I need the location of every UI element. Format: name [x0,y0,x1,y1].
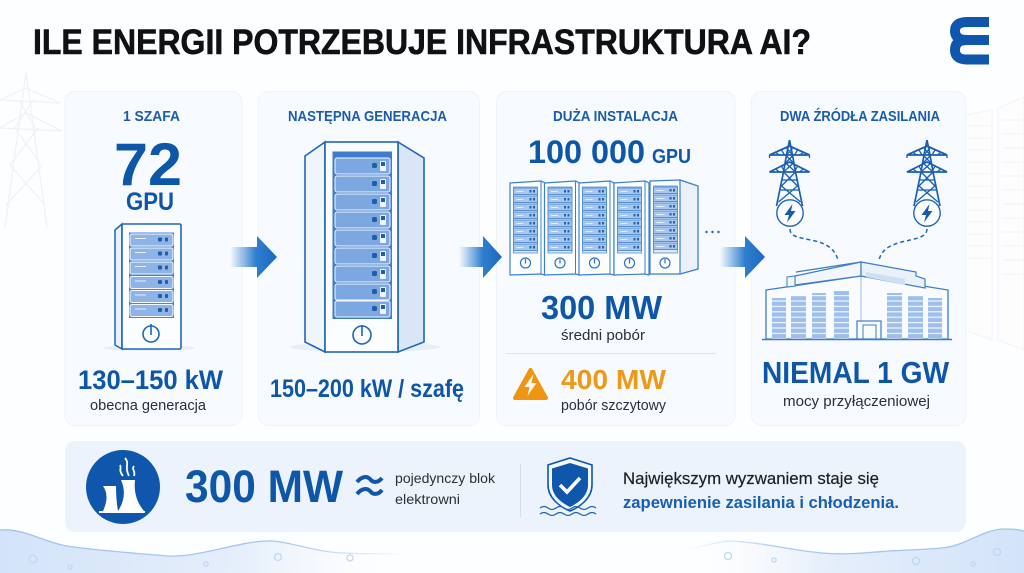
icon: power plant [86,450,160,524]
bottom banner [65,441,966,532]
heading: 1 szafa: 1 SZAFA [123,108,180,125]
panel: następna generacja [258,92,480,426]
number: 100 000 GPU: 100 000 [528,134,645,170]
heading: duża instalacja: DUŻA INSTALACJA [553,108,678,125]
logo [955,22,989,60]
number: 72 GPU: 72 [114,131,182,198]
icon: right pylon [907,140,947,226]
heading: dwa źródła zasilania: DWA ŹRÓDŁA ZASILANIA [780,107,940,125]
arrow 1 [230,236,277,278]
panel: duża instalacja [496,92,735,426]
icon: left pylon [770,140,810,226]
symbol: approximately [357,477,382,494]
decorative background pylon [0,72,62,228]
panel: 1 szafa [65,92,242,426]
label: pojedynczy blok elektrowni: pojedynczy blok [395,470,496,486]
value: 130–150 kW: 130–150 kW [78,365,223,395]
icon: server rack [103,224,195,351]
arrow 2 [459,236,502,278]
heading: następna generacja: NASTĘPNA GENERACJA [288,108,447,125]
decorative background racks [965,97,1024,350]
value: 300 MW: 300 MW [541,289,663,326]
number: 72 GPU: GPU [126,188,174,216]
icon: row of server racks [510,180,720,275]
label: pobór szczytowy: pobór szczytowy [561,397,666,414]
icon: data center building [762,262,952,340]
callout text: Największym wyzwaniem staje się [623,469,879,488]
label: pojedynczy blok elektrowni: elektrowni [395,491,460,507]
icon: warning [515,370,546,398]
value: 300 MW: 300 MW [185,461,343,512]
power lines [790,229,927,260]
icon: shield [540,458,596,516]
panel: dwa źródła zasilania [752,92,966,426]
label: pojedynczy blok elektrowni [395,470,496,507]
decorative water waves [0,529,1024,573]
value: 150–200 kW / szafę: 150–200 kW / szafę [270,375,464,403]
title: ILE ENERGII POTRZEBUJE INFRASTRUKTURA AI? [33,23,811,62]
callout text [623,469,899,512]
icon: large server rack [290,142,440,352]
value: 400 MW: 400 MW [561,364,667,395]
label: mocy przyłączeniowej: mocy przyłączeniowej [783,393,930,410]
number: 100 000 GPU: GPU [652,146,691,168]
callout text: zapewnienie zasilania i chłodzenia. [623,493,899,512]
label: średni pobór: średni pobór [561,327,645,344]
label: obecna generacja: obecna generacja [90,397,207,414]
arrow 3 [720,236,765,278]
value: niemal 1 GW: NIEMAL 1 GW [762,355,950,390]
